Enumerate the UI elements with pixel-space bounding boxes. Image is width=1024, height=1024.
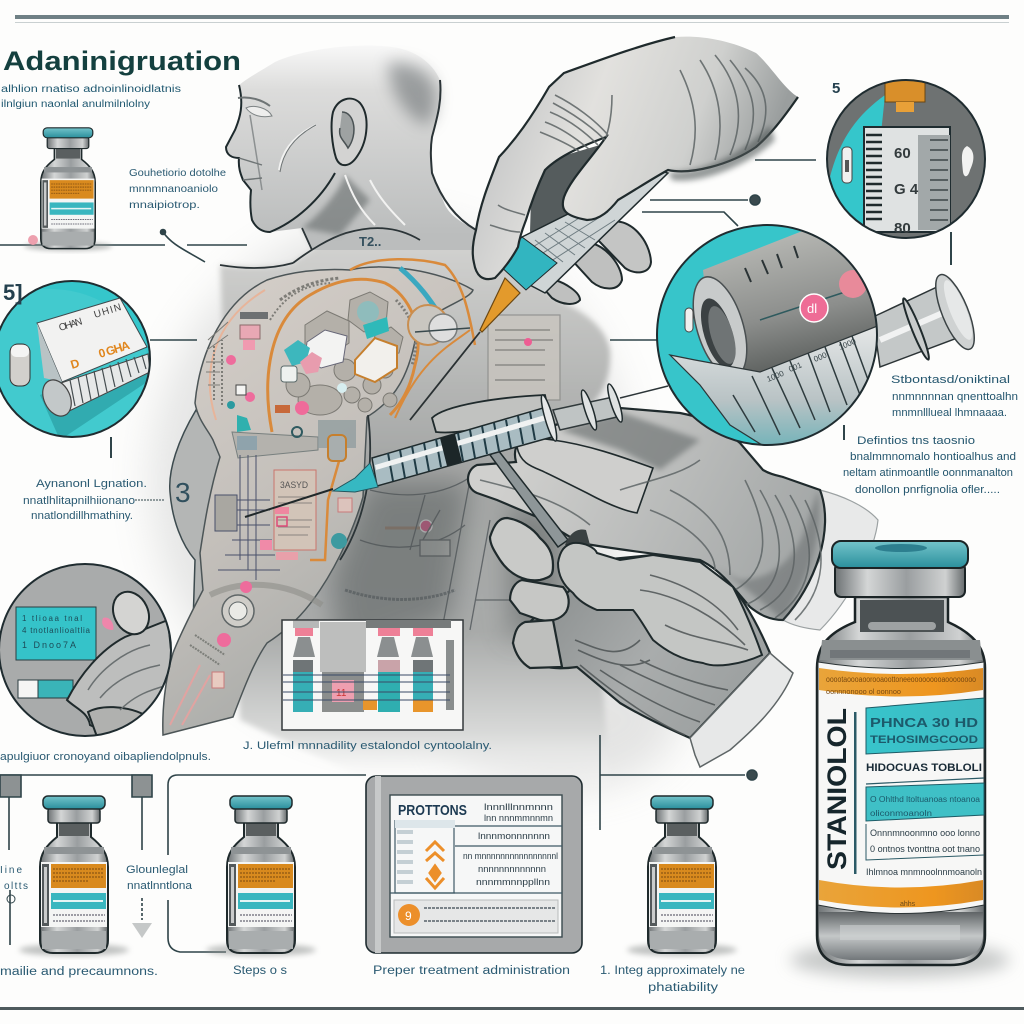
barrel <box>372 408 552 486</box>
callout: top-left: mnaipiotrop. <box>129 199 200 211</box>
note left of vial 1: oltts <box>4 881 28 892</box>
intro text: alhlion rnatiso adnoinlinoidlatnis <box>1 84 181 95</box>
caption: left: apulgiuor cronoyand oibapliendolpnuls. <box>0 751 211 763</box>
callout: left text <box>23 478 147 522</box>
orange band top: oonnnonooo ol oonnoo <box>826 689 901 696</box>
glove cuff <box>690 653 793 767</box>
callout: left text: nnatlhlitapnilhiionano <box>23 495 135 507</box>
teal box two: oliconmoanoln <box>870 809 932 818</box>
finger two <box>510 580 569 621</box>
inset: top-right circle gauge <box>827 80 985 240</box>
label text block: Onnnmnoonmno ooo lonno <box>870 828 980 838</box>
orange arrows <box>426 842 444 888</box>
torso folds and details <box>345 315 560 700</box>
glove in bottom-left circle <box>66 620 170 728</box>
protocol panel: 9 <box>405 909 412 923</box>
inset: bottom-left circle <box>0 564 176 745</box>
inset box: vials <box>282 620 463 730</box>
inset: large circle syringe: 1000 <box>765 369 786 384</box>
palm folds <box>575 575 748 735</box>
inset: left circle: 0 GHA <box>97 338 132 361</box>
label T2: T2.. <box>359 234 381 249</box>
callout: right text one <box>891 374 1018 419</box>
top-left vial <box>24 128 112 251</box>
hand dark crook <box>560 412 700 470</box>
callout: right text two <box>843 435 1016 496</box>
protocol panel: nnnmmnnppllnn <box>476 877 550 887</box>
finger one <box>490 518 553 580</box>
vertical STANIOLOL: STANIOLOL <box>822 708 852 870</box>
inset: bottom-left circle: 1 Dnoo7A <box>22 640 76 650</box>
inset: left circle: D <box>69 356 81 372</box>
bold line: HIDOCUAS TOBLOLI <box>866 762 982 774</box>
head and neck <box>220 45 480 268</box>
forearm grid <box>215 455 280 580</box>
back of arm backdrop <box>170 410 225 720</box>
teal box two: O Ohlthd ltoltuanoas ntoanoa <box>870 795 981 804</box>
callout: right text two: Defintios tns taosnio <box>857 435 975 447</box>
inset: large circle syringe: 001 <box>787 360 804 374</box>
teal box one: PHNCA 30 HD <box>870 715 978 730</box>
bottom row frame and tabs <box>0 775 366 952</box>
note left of vial 1: Iine <box>0 865 22 876</box>
step number 3: 3 <box>175 477 191 508</box>
back of head shade <box>388 62 436 125</box>
vial collar <box>835 563 965 597</box>
inset: left circle <box>0 281 150 445</box>
vial cap <box>832 541 968 568</box>
inset box: vials: 11 <box>336 688 347 699</box>
upper syringe <box>408 170 668 420</box>
text-like forearm panel <box>274 470 316 550</box>
label text block: Ihlmnoa mnmnoolnnmoanoln <box>866 867 982 877</box>
note right of vial 1: Glounleglal <box>126 864 188 876</box>
caption: bottom four <box>600 965 745 994</box>
callout: top-left: mnnmnanoaniolo <box>129 183 218 195</box>
upper gloved hand <box>473 37 798 279</box>
protocol panel: nnnnnnnnnnnnn <box>478 864 546 874</box>
ear <box>332 99 367 165</box>
dark shading beside arm <box>330 480 560 660</box>
bottom vial 2 <box>206 796 316 956</box>
orange muscle arcs <box>268 279 418 432</box>
note left of vial 1 <box>0 865 28 903</box>
inset: top-right circle gauge: 60 <box>894 145 911 162</box>
caption: bottom four: phatiability <box>648 982 718 994</box>
label text block: 0 ontnos tvonttna oot tnano <box>870 844 980 854</box>
callout: right text two: bnalmmnomalo hontioalhus and <box>850 451 1016 463</box>
intro text: ilnlgiun naonlal anulmilnlolny <box>1 99 150 110</box>
caption: center: J. Ulefml mnnadility estalondol cyntoolalny. <box>243 740 492 752</box>
inset: top-right circle gauge: 80 <box>894 220 911 237</box>
index finger <box>517 438 653 513</box>
label text block <box>866 824 984 877</box>
vial base <box>819 912 983 960</box>
protocol panel: lnn nnnmmnnmn <box>484 813 553 823</box>
callout: right text one: mnmnlllueal lhmnaaaa. <box>892 407 1007 419</box>
note right of vial 1 <box>126 864 193 892</box>
cells cluster <box>286 292 403 415</box>
inset: bottom-left circle: 1 tlioaa tnal <box>22 614 82 623</box>
lower gloved hand (upper part) <box>468 408 825 620</box>
white capsule <box>355 338 397 382</box>
callout: right text two: neltam atinmoantlle oonnmanalton <box>843 467 1013 479</box>
arm with anatomical map <box>163 259 475 735</box>
callout: top-left: Gouhetiorio dotolhe <box>129 167 226 179</box>
teal box two <box>866 783 984 821</box>
inset: large circle syringe <box>657 225 880 450</box>
step number 5 right: 5 <box>832 80 840 97</box>
note right of vial 1: nnatlnntlona <box>127 880 193 892</box>
thumb <box>558 543 762 665</box>
pink dot <box>28 235 38 245</box>
inset: left circle: UHIN <box>93 302 123 321</box>
inset: bottom-left circle: 4 tnotlanlioaltlia <box>22 626 91 635</box>
eye and wrinkles <box>246 106 272 117</box>
finger three <box>513 620 562 668</box>
protocol panel: lnnnmonnnnnnn <box>478 831 550 841</box>
caption: bottom four: 1. Integ approximately ne <box>600 965 745 977</box>
torso <box>220 228 610 790</box>
orange band bottom <box>819 880 983 908</box>
inset: left circle: OHAN <box>58 316 84 334</box>
armband <box>232 432 318 458</box>
caption: bottom two: Steps o s <box>233 965 287 977</box>
glove shade <box>668 125 775 181</box>
label background <box>818 662 984 914</box>
callout: right text one: nnmnnnnan qnenttoalhn <box>892 391 1018 403</box>
upper glove lower fingers <box>530 145 651 304</box>
callout: left text: Aynanonl Lgnation. <box>36 478 147 490</box>
soft shading behind figure <box>150 220 680 790</box>
text-like forearm panel: 3ASYD <box>280 480 308 490</box>
orange band top <box>819 668 983 696</box>
inset: top-right circle gauge: G 4 <box>894 181 919 198</box>
large Staniolol vial <box>790 541 1010 978</box>
lower gloved hand (second hand) <box>490 518 770 738</box>
cuff of lower hand <box>783 490 878 630</box>
protocol panel: nn mnnnnnnnnnnnnnnnnl <box>463 851 558 861</box>
inset: large circle syringe: dl <box>807 301 817 316</box>
inset: large circle syringe: 000 <box>812 350 829 364</box>
intro text <box>1 84 181 110</box>
teal box one: TEHOSIMGCOOD <box>870 734 978 746</box>
plunger rod <box>553 397 617 430</box>
title: Adaninigruation <box>3 46 241 76</box>
callout: right text one: Stbontasd/oniktinal <box>891 374 1010 386</box>
bottom vial 3 <box>627 796 737 956</box>
callout: right text two: donollon pnrfignolia ofler..... <box>855 484 1000 496</box>
orange badge <box>394 900 558 933</box>
main needle <box>245 489 333 517</box>
neck shade <box>302 175 370 235</box>
main syringe <box>245 383 668 517</box>
step number 5 left: 5] <box>3 280 23 305</box>
bottom vial 1 <box>19 796 129 956</box>
teal box one <box>866 698 984 754</box>
plunger exterior <box>873 270 982 367</box>
inset: large circle syringe: 1000 <box>837 337 858 352</box>
syringe finger <box>432 395 548 433</box>
callout: left text: nnatlondillhmathiny. <box>31 510 133 522</box>
orange band top: ooootaoooaoorooaoottoneeooooooooaoooooooo <box>826 675 976 684</box>
protocol panel <box>366 776 582 953</box>
forceps tool <box>490 450 568 547</box>
connector lines <box>0 160 951 830</box>
orange band bottom: ahhs <box>900 901 916 908</box>
caption: bottom one: mailie and precaumnons. <box>0 966 158 978</box>
protocol panel: lnnnlllnnmnnn <box>484 802 553 812</box>
glove folds <box>490 55 766 232</box>
protocol panel: PROTTONS <box>398 802 467 819</box>
caption: bottom three: Preper treatment administration <box>373 965 570 977</box>
upper needle <box>410 332 480 420</box>
callout: top-left <box>129 167 226 211</box>
teal hub <box>333 463 378 492</box>
